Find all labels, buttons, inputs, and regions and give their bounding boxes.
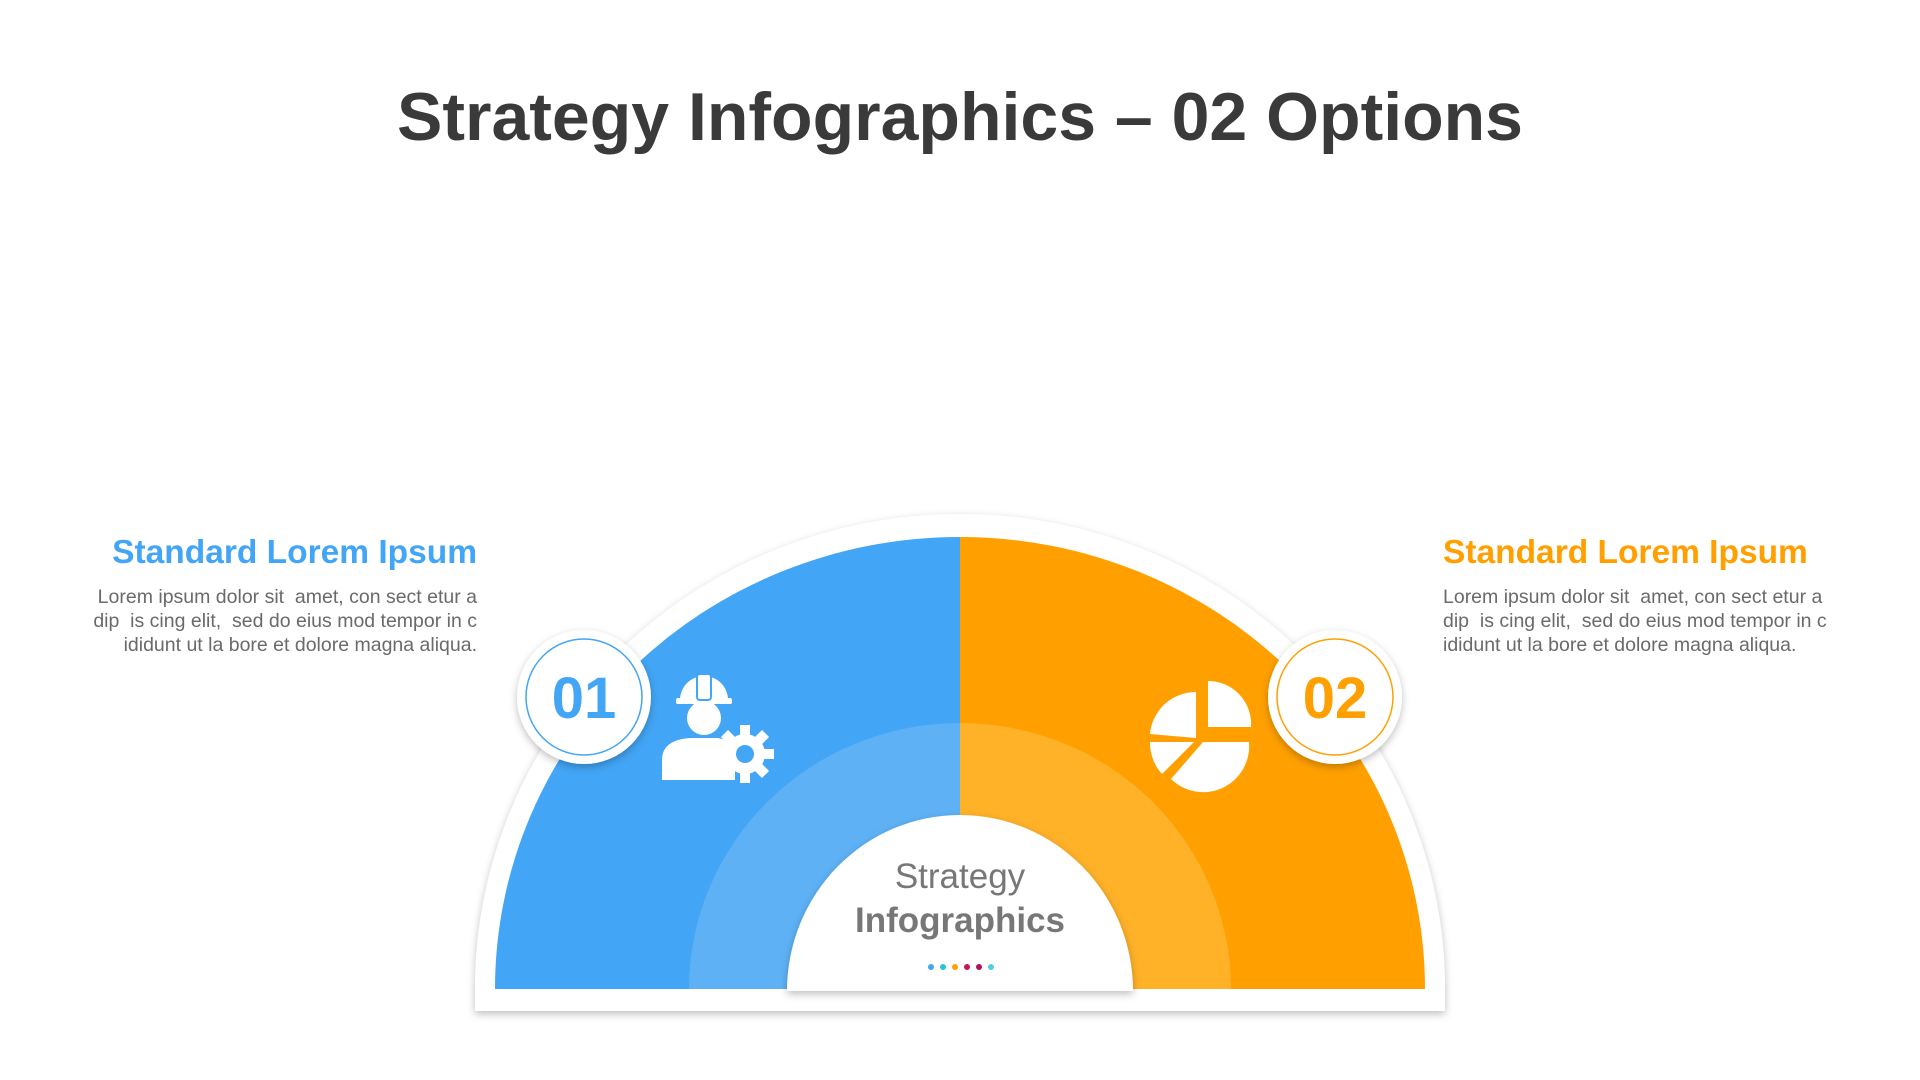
center white: [787, 815, 1133, 991]
text block: option 1: Lorem ipsum dolor sit amet, con sect etur a: [98, 586, 477, 608]
text block: option 2: dip is cing elit, sed do eius mod tempor in c: [1443, 610, 1827, 632]
center text: Strategy: [895, 857, 1026, 896]
text block: option 1: ididunt ut la bore et dolore magna aliqua.: [124, 634, 477, 656]
text block: option 2: Standard Lorem Ipsum: [1443, 534, 1808, 571]
title: Strategy Infographics – 02 Options: [397, 79, 1523, 155]
text block: option 2: ididunt ut la bore et dolore magna aliqua.: [1443, 634, 1796, 656]
white backdrop: [475, 514, 1445, 1011]
center text: Infographics: [855, 901, 1065, 940]
badge 01: [517, 630, 651, 764]
text block: option 2: [1443, 534, 1827, 656]
text block: option 1: [93, 534, 477, 656]
badge 02: 02: [1303, 666, 1367, 731]
icon: pie chart: [1150, 681, 1251, 792]
icon: worker with gear: [662, 674, 774, 783]
text block: option 1: dip is cing elit, sed do eius mod tempor in c: [93, 610, 477, 632]
center text: [855, 857, 1065, 970]
badge 01: 01: [552, 666, 616, 731]
text block: option 2: Lorem ipsum dolor sit amet, con sect etur a: [1443, 586, 1822, 608]
text block: option 1: Standard Lorem Ipsum: [112, 534, 477, 571]
badge 02: [1268, 630, 1402, 764]
segment: blue: [495, 537, 960, 989]
segment: orange: [960, 537, 1425, 989]
